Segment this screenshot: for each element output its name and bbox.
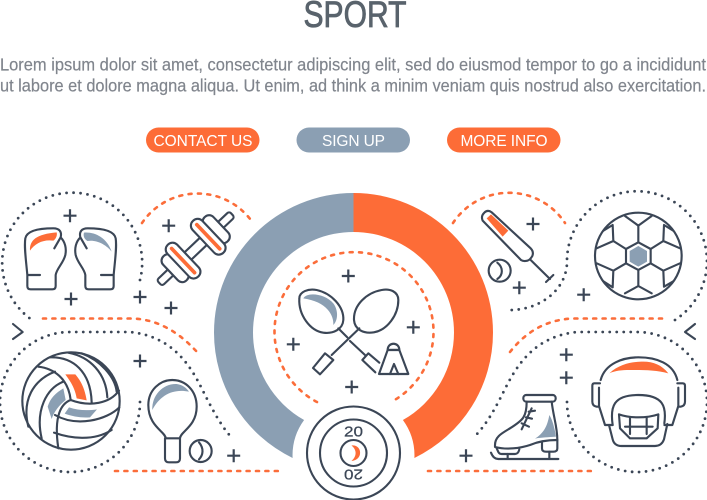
icon: medal: 20 bbox=[344, 424, 363, 441]
button: more info: MORE INFO bbox=[460, 133, 548, 150]
plus signs bbox=[64, 209, 590, 462]
button: contact us bbox=[146, 128, 260, 152]
button: contact us: CONTACT US bbox=[154, 133, 252, 150]
intro text block bbox=[0, 54, 706, 96]
connector paths bbox=[0, 191, 707, 472]
icon: soccer ball bbox=[595, 213, 682, 299]
icon: boxing gloves bbox=[25, 228, 116, 289]
arrow: right chevron bbox=[685, 324, 695, 339]
icon: badminton rackets and shuttlecock bbox=[299, 290, 408, 374]
icon: ice skate bbox=[491, 395, 558, 459]
button: sign up: SIGN UP bbox=[322, 133, 385, 150]
icon: medal bbox=[307, 406, 400, 500]
arrow: left chevron bbox=[13, 324, 23, 339]
button: more info bbox=[447, 128, 560, 152]
icon: medal: 20 bbox=[344, 465, 363, 482]
icon: hockey helmet bbox=[592, 357, 685, 446]
icon: cricket bat and ball bbox=[482, 211, 553, 282]
icon: volleyball bbox=[22, 352, 120, 450]
button: sign up bbox=[296, 128, 410, 152]
icon: table tennis paddle and ball bbox=[148, 380, 212, 462]
donut ring bbox=[214, 193, 493, 458]
icon: dumbbell bbox=[144, 198, 247, 299]
